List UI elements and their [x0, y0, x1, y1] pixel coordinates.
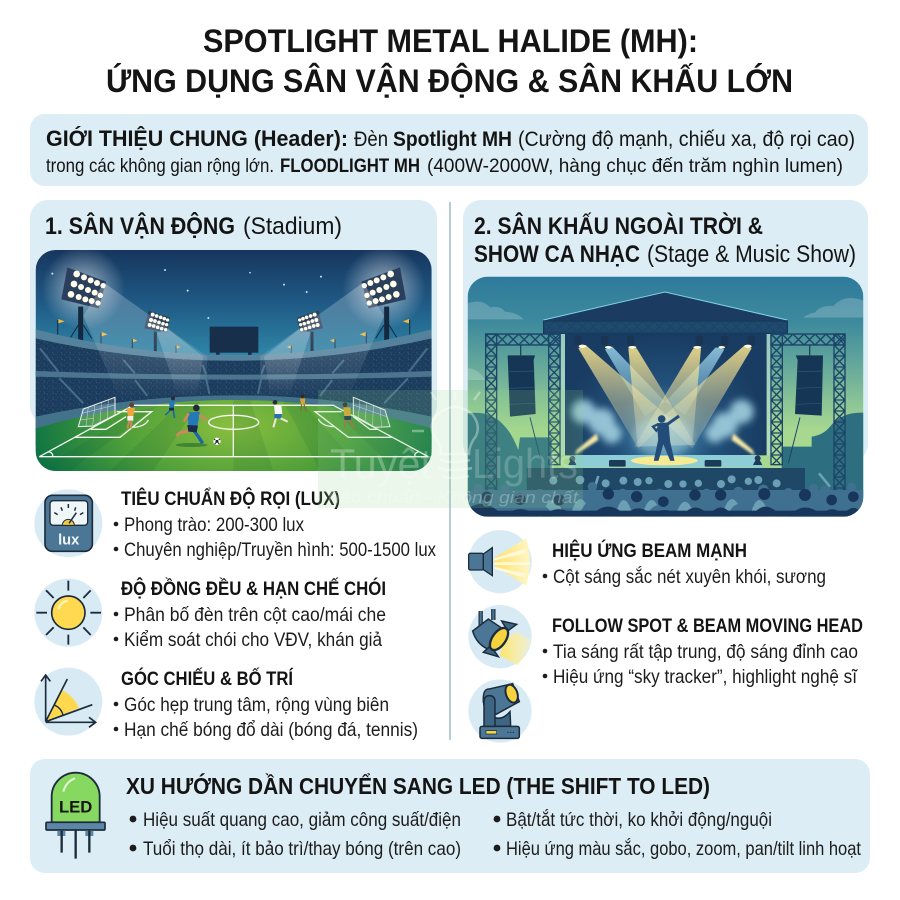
icon: LED: [46, 773, 105, 859]
stands: [36, 329, 432, 447]
list: follow spot: Tia sáng rất tập trung, độ sáng đỉnh cao: [553, 641, 858, 663]
heading: beam: HIỆU ỨNG BEAM MẠNH: [552, 538, 747, 562]
section: follow spot and moving head: [468, 605, 863, 743]
panel: introduction header: GIỚI THIỆU CHUNG (Header):: [46, 126, 348, 151]
panel: stage and music show: [463, 200, 868, 517]
list: LED benefits left: Hiệu suất quang cao, giảm công suất/điện: [143, 809, 461, 831]
list: uniformity: Phân bố đèn trên cột cao/mái che: [124, 604, 386, 626]
heading: stage: SHOW CA NHẠC: [474, 241, 640, 268]
panel: introduction header: trong các không gian rộng lớn.: [46, 155, 274, 177]
heading: LED: XU HƯỚNG DẦN CHUYỂN SANG LED (THE SHIFT TO LED): [126, 772, 710, 799]
section: beam angle: [34, 666, 418, 741]
icon: sun: [34, 579, 102, 647]
list: follow spot: [543, 641, 858, 688]
watermark: Tiêu chuẩn - Không gian chất: [324, 488, 579, 507]
heading: stage: (Stage & Music Show): [647, 241, 856, 268]
panel: introduction header: (Cường độ mạnh, chiếu xa, độ rọi cao): [518, 128, 855, 151]
illustration: outdoor concert stage: [468, 277, 863, 517]
panel: introduction header: Spotlight MH: [393, 128, 512, 151]
players and ball: [127, 395, 354, 447]
heading: stadium: 1. SÂN VẬN ĐỘNG: [45, 212, 235, 240]
list: LED benefits left: [130, 809, 461, 860]
stage head fixtures: [574, 336, 755, 346]
icon: LED: LED: [59, 797, 92, 816]
list: beam: Cột sáng sắc nét xuyên khói, sương: [553, 565, 826, 588]
line array speakers: [508, 345, 823, 463]
list: LED benefits left: Tuổi thọ dài, ít bảo trì/thay bóng (trên cao): [143, 838, 461, 860]
panel: shift to LED: [30, 759, 870, 873]
title: [106, 23, 793, 99]
singer silhouette: [653, 415, 679, 461]
section: lux standard: [34, 486, 436, 561]
list: uniformity: [114, 604, 386, 651]
side towers: [486, 334, 845, 491]
spotlight beams: [578, 345, 752, 457]
heading: stadium: (Stadium): [243, 213, 342, 240]
watermark: Lights: [472, 440, 578, 487]
list: LED benefits right: [494, 808, 861, 860]
icon: angle diagram: [34, 668, 102, 736]
section: uniformity and glare: [34, 576, 386, 651]
icon: beam lamp: [468, 530, 532, 593]
heading: stadium: [45, 212, 342, 240]
panel: stadium: [30, 200, 437, 471]
list: lux levels: [114, 514, 436, 561]
list: angle: Hạn chế bóng đổ dài (bóng đá, tennis): [124, 719, 418, 741]
panel: introduction header: (400W-2000W, hàng chục đến trăm nghìn lumen): [427, 155, 843, 177]
treeline: [468, 413, 863, 517]
section: beam effect: [468, 530, 826, 593]
panel: introduction header: Đèn: [354, 128, 388, 151]
heading: uniformity: ĐỘ ĐỒNG ĐỀU & HẠN CHẾ CHÓI: [121, 576, 386, 600]
list: lux levels: Phong trào: 200-300 lux: [124, 514, 304, 536]
list: lux levels: Chuyên nghiệp/Truyền hình: 500-1500 lux: [124, 539, 436, 561]
stage floor: [527, 455, 805, 491]
heading: stage: 2. SÂN KHẤU NGOÀI TRỜI &: [474, 212, 763, 240]
goals: [78, 397, 390, 427]
stage backdrop: [565, 333, 767, 455]
list: angle: [114, 694, 418, 741]
panel: introduction header: [30, 114, 868, 186]
beams of light: [83, 283, 384, 400]
heading: angle: GÓC CHIẾU & BỐ TRÍ: [121, 666, 293, 690]
illustration: night stadium with floodlights: [36, 247, 432, 471]
list: follow spot: Hiệu ứng “sky tracker”, highlight nghệ sĩ: [553, 666, 858, 688]
roof and truss: [543, 292, 787, 333]
divider: [449, 202, 451, 740]
panel: introduction header: FLOODLIGHT MH: [280, 155, 420, 177]
heading: lux: TIÊU CHUẨN ĐỘ RỌI (LUX): [121, 486, 340, 510]
audience: [468, 473, 863, 517]
list: angle: Góc hẹp trung tâm, rộng vùng biên: [124, 694, 389, 716]
icon: lux meter: lux: [58, 532, 80, 548]
watermark: Tuyệt: [330, 440, 432, 487]
scoreboard: [210, 327, 258, 356]
title: SPOTLIGHT METAL HALIDE (MH):: [203, 23, 698, 59]
list: uniformity: Kiểm soát chói cho VĐV, khán giả: [124, 629, 382, 651]
heading: stage: [474, 212, 856, 268]
pitch: [36, 400, 432, 471]
icon: moving head: [468, 679, 532, 743]
watermark: [318, 390, 583, 508]
list: LED benefits right: Bật/tắt tức thời, ko khởi động/nguội: [506, 808, 772, 831]
smoke: [571, 400, 754, 443]
icon: follow spot: [468, 605, 532, 668]
icon: lux meter: [34, 489, 102, 557]
title: ỨNG DỤNG SÂN VẬN ĐỘNG & SÂN KHẤU LỚN: [106, 63, 793, 99]
